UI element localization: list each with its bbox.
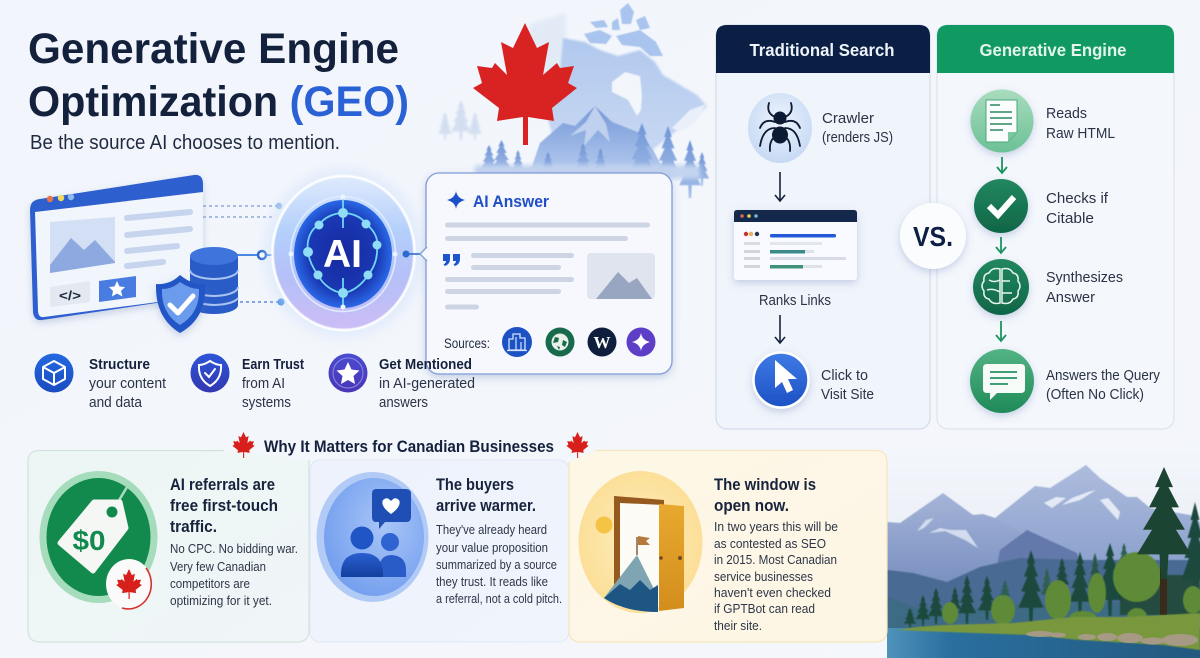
card 3 body (714, 519, 838, 633)
panel: Generative Engine (937, 25, 1174, 429)
feature: Earn Trust: systems (242, 394, 291, 411)
card 3 body: in 2015. Most Canadian (714, 552, 837, 567)
header (716, 25, 930, 73)
sky (880, 450, 1200, 600)
icon: cursor (754, 352, 808, 408)
feature: Earn Trust: Earn Trust (242, 357, 304, 373)
card 2 body: They've already heard (436, 522, 547, 537)
arrow (996, 321, 1006, 341)
card 2 heading (436, 476, 536, 515)
heading icon: left maple leaf (232, 432, 255, 458)
feature: Get Mentioned: answers (379, 394, 428, 411)
distant pale trees (438, 100, 482, 140)
blue tree line (481, 123, 709, 198)
connectors to AI core (203, 203, 290, 306)
card 2 body: a referral, not a cold pitch. (436, 591, 562, 606)
card 3 body: their site. (714, 618, 762, 633)
answers label: Answers the Query (1046, 367, 1160, 384)
maple leaf (473, 23, 577, 145)
card 1 body: No CPC. No bidding war. (170, 541, 298, 556)
Canada badge (106, 559, 152, 609)
arrow (997, 157, 1007, 173)
icon: quote mark (443, 254, 460, 266)
AI core (264, 168, 424, 338)
code button (50, 281, 90, 307)
card 2 body (436, 522, 562, 606)
checks label (1046, 190, 1109, 227)
answer text lines (445, 222, 650, 310)
icon: document (970, 90, 1034, 152)
feature: Structure: your content (89, 375, 167, 392)
arrow (996, 237, 1006, 253)
card 2 heading: The buyers (436, 476, 514, 494)
search results window (734, 210, 857, 280)
card 3 heading: The window is (714, 476, 816, 494)
header: Generative Engine (980, 40, 1127, 60)
checks label: Citable (1046, 210, 1094, 227)
card 1 body: optimizing for it yet. (170, 593, 272, 608)
icon: people with heart bubble (316, 472, 428, 602)
code button: </> (59, 288, 81, 303)
icon: shield (156, 275, 205, 333)
reads label: Reads (1046, 105, 1087, 122)
title (28, 25, 409, 126)
feature: Earn Trust (190, 354, 304, 411)
core sphere (294, 200, 392, 308)
icon: check (974, 179, 1028, 233)
feature: Get Mentioned: in AI-generated (379, 375, 475, 392)
feature: Structure: and data (89, 394, 143, 411)
header (937, 25, 1174, 73)
halo (264, 168, 424, 338)
circuit nodes (288, 194, 398, 310)
icon: spider (748, 93, 812, 163)
card 1 heading: free first-touch (170, 497, 278, 515)
answer heading (447, 191, 550, 211)
card 3 body: haven't even checked (714, 585, 831, 600)
card 2 body: your value proposition (436, 540, 548, 555)
arrow (775, 172, 785, 201)
answer heading: AI Answer (473, 193, 550, 211)
blue mountain (530, 106, 665, 172)
click label: Click to (821, 367, 868, 384)
Canada map (522, 3, 707, 160)
section heading backing (224, 428, 596, 460)
reads label: Raw HTML (1046, 125, 1115, 142)
icon: brain (973, 259, 1029, 315)
icon: price tag: $0 (72, 525, 106, 556)
synthesizes label: Answer (1046, 289, 1095, 306)
shore rocks (1026, 631, 1198, 646)
answers label: (Often No Click) (1046, 386, 1144, 403)
panel: Traditional Search (716, 25, 930, 429)
icon: cube (34, 354, 74, 392)
card 3 heading: open now. (714, 497, 789, 515)
window controls (47, 194, 74, 202)
reads label (1046, 105, 1115, 142)
illustration: website window (30, 175, 203, 320)
source icon: Wikipedia (588, 328, 616, 356)
illustration: Canada map, maple leaf and mountain (438, 3, 709, 198)
feature: Structure: Structure (89, 357, 150, 373)
icon: star badge (328, 354, 368, 392)
illustration: database (190, 247, 238, 314)
notch (420, 247, 427, 261)
icon: chat bubble (970, 349, 1034, 413)
card 2 body: summarized by a source (436, 557, 557, 572)
mist base (475, 165, 700, 179)
card 1 heading: AI referrals are (170, 476, 275, 494)
lower hills (887, 558, 1200, 630)
landscape: mountains, forest and lake (880, 450, 1200, 658)
lake (887, 628, 1200, 658)
ranks links label: Ranks Links (759, 292, 831, 309)
card: buyers arrive warmer (310, 460, 569, 642)
connector to AI answer (402, 250, 420, 258)
card 3 body: if GPTBot can read (714, 601, 815, 616)
heading icon: right maple leaf (566, 432, 589, 458)
panel: AI Answer (420, 173, 672, 374)
subtitle: Be the source AI chooses to mention. (30, 132, 340, 154)
star button (99, 276, 136, 302)
section heading (232, 432, 589, 458)
arrow (775, 315, 785, 343)
image thumbnail (587, 253, 655, 299)
source icon: Wikipedia: W (594, 333, 610, 352)
synthesizes label (1046, 269, 1123, 306)
icon: open door (578, 471, 702, 613)
leafy trees (942, 552, 1200, 626)
shoreline (897, 613, 1200, 650)
card: AI referrals (28, 450, 309, 642)
title line 2: Optimization (GEO) (28, 78, 409, 126)
VS badge (900, 203, 966, 269)
VS badge: VS. (913, 221, 953, 252)
card 3 heading (714, 476, 816, 515)
icon: price tag (40, 471, 158, 609)
card 3 body: service businesses (714, 569, 813, 584)
feature: Structure (34, 354, 167, 411)
answers label (1046, 367, 1160, 403)
card 2 heading: arrive warmer. (436, 497, 536, 515)
source icon: building (502, 327, 532, 357)
card 1 heading: traffic. (170, 518, 217, 536)
feature: Earn Trust: from AI (242, 375, 285, 392)
header: Traditional Search (750, 40, 894, 60)
sources label: Sources: (444, 336, 490, 351)
crawler label: (renders JS) (822, 129, 893, 146)
forest (904, 502, 1200, 628)
synthesizes label: Synthesizes (1046, 269, 1123, 286)
big pine (1137, 467, 1191, 615)
icon: shield badge (190, 354, 230, 392)
text lines (127, 212, 190, 266)
AI label: AI (323, 233, 362, 276)
source icon: globe (546, 328, 574, 356)
crawler label: Crawler (822, 110, 874, 127)
source icon: spark (626, 328, 656, 356)
card 3 body: as contested as SEO (714, 536, 826, 551)
crawler label (822, 110, 893, 146)
title line 1: Generative Engine (28, 25, 399, 73)
heading text: Why It Matters for Canadian Businesses (264, 438, 554, 456)
feature: Get Mentioned (328, 354, 475, 411)
card 1 heading (170, 476, 278, 536)
click label: Visit Site (821, 386, 874, 403)
card 2 body: they trust. It reads like (436, 574, 548, 589)
click label (821, 367, 874, 403)
card 1 body (170, 541, 298, 608)
card 1 body: competitors are (170, 576, 250, 591)
card 3 body: In two years this will be (714, 519, 838, 534)
feature: Get Mentioned: Get Mentioned (379, 357, 472, 373)
image placeholder (50, 217, 115, 273)
far mountains (887, 465, 1200, 610)
checks label: Checks if (1046, 190, 1109, 207)
card: window is open (569, 450, 887, 642)
card 1 body: Very few Canadian (170, 559, 266, 574)
